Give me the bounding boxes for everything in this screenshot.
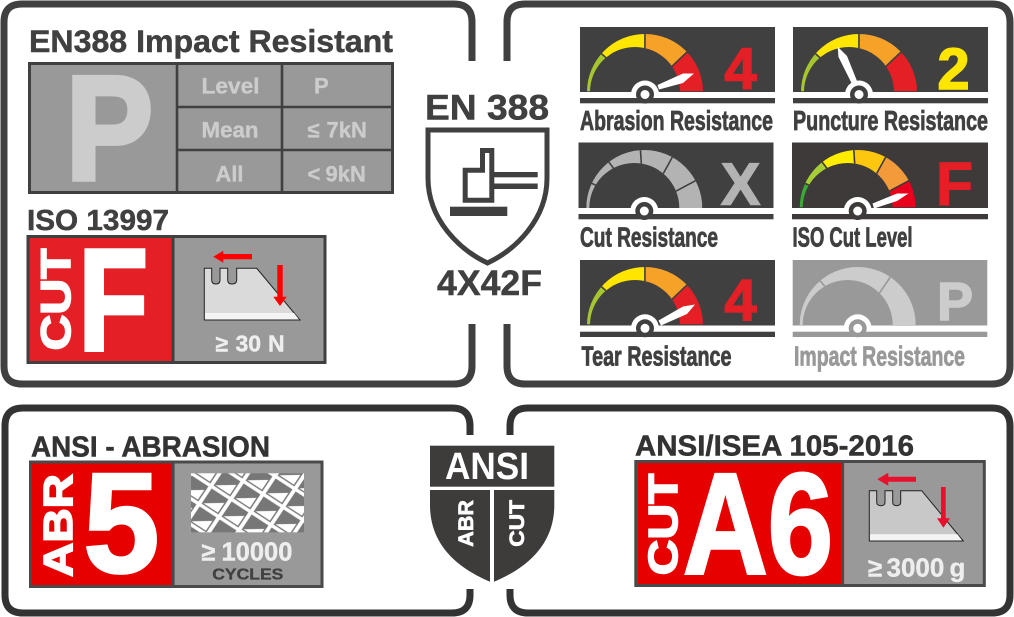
table text: mean value: ≤ [308,118,320,143]
gauge value P: P [937,272,973,332]
icon: EN 388 shield with hammer [428,130,547,263]
panel frame: EN 388 resistance gauges [507,4,1010,384]
label: CYCLES: CYCLES [212,566,284,583]
big grade A6: A6 [683,443,833,604]
table text: P: P [314,74,329,98]
label: at least 10000: ≥ [202,539,216,567]
gauge value 2: 2 [937,37,970,102]
shield label ABR: ABR [454,500,478,547]
label: ISO Cut Level: ISO Cut Level [792,222,912,253]
label: at least 30 N: ≥ [216,331,228,357]
gauge: puncture resistance 2 [793,27,988,104]
label: at least 10000: 10000 [222,539,292,567]
shield title ANSI: ANSI [445,446,529,488]
table text: all value: < [308,162,320,187]
heading: ISO 13997: ISO 13997 [27,205,169,237]
table text: mean value: 7kN [326,118,367,143]
badge: ANSI abrasion 5 [30,444,322,603]
label: at least 3000 g: 3000 [886,553,944,583]
icon: abrasion mesh pattern [191,473,304,532]
gauge: abrasion resistance 4 [580,27,775,104]
shield label CUT: CUT [505,500,529,547]
label: Tear Resistance: Tear Resistance [582,341,732,372]
icon: blade with force arrows [204,251,300,320]
label: at least 3000 g: ≥ [868,553,882,583]
gauge: ISO cut level F [792,142,988,220]
table text: All: All [216,162,244,187]
table text: all value: 9kN [326,162,366,187]
label: at least 30 N: 30 [236,331,261,357]
label: at least 30 N: N [268,331,285,357]
table text: Level: Level [202,74,260,98]
gauge value 4: 4 [724,36,757,101]
icon: blade with force arrows [869,473,963,541]
panel frame: EN388 impact and ISO cut [4,4,472,384]
gauge value X: X [721,152,760,218]
badge: ISO cut F [28,219,325,381]
shield left half [430,490,490,582]
badge: ANSI cut A6 [636,443,984,604]
rotated label ABR: ABR [35,474,81,577]
gauge value F: F [936,150,973,218]
gauge: cut resistance X [578,142,774,220]
panel frame: ANSI abrasion [5,408,470,613]
icon: ANSI shield [430,446,554,582]
gauge: impact resistance P [792,260,988,338]
shield right half [494,490,554,582]
label: Abrasion Resistance: Abrasion Resistance [580,105,773,136]
heading: EN388 Impact Resistant: EN388 Impact Resistant [29,23,394,59]
table text: Mean: Mean [202,118,258,143]
table: impact level P [30,45,392,211]
rotated label CUT: CUT [640,474,686,575]
panel frame: ANSI cut [510,408,1010,613]
gauge value 4: 4 [724,268,757,333]
heading: EN 388: EN 388 [425,88,549,128]
label: Cut Resistance: Cut Resistance [580,222,718,253]
big numeral 5: 5 [84,444,159,603]
big letter F: F [78,219,148,381]
label: at least 3000 g: g [950,553,965,583]
heading: ANSI - ABRASION: ANSI - ABRASION [31,432,270,464]
gauge: tear resistance 4 [580,260,775,338]
big letter P: P [66,45,153,211]
rating code: 4X42F: 4X42F [437,264,542,303]
heading: ANSI/ISEA 105-2016: ANSI/ISEA 105-2016 [635,431,914,463]
rotated label CUT: CUT [32,248,79,350]
